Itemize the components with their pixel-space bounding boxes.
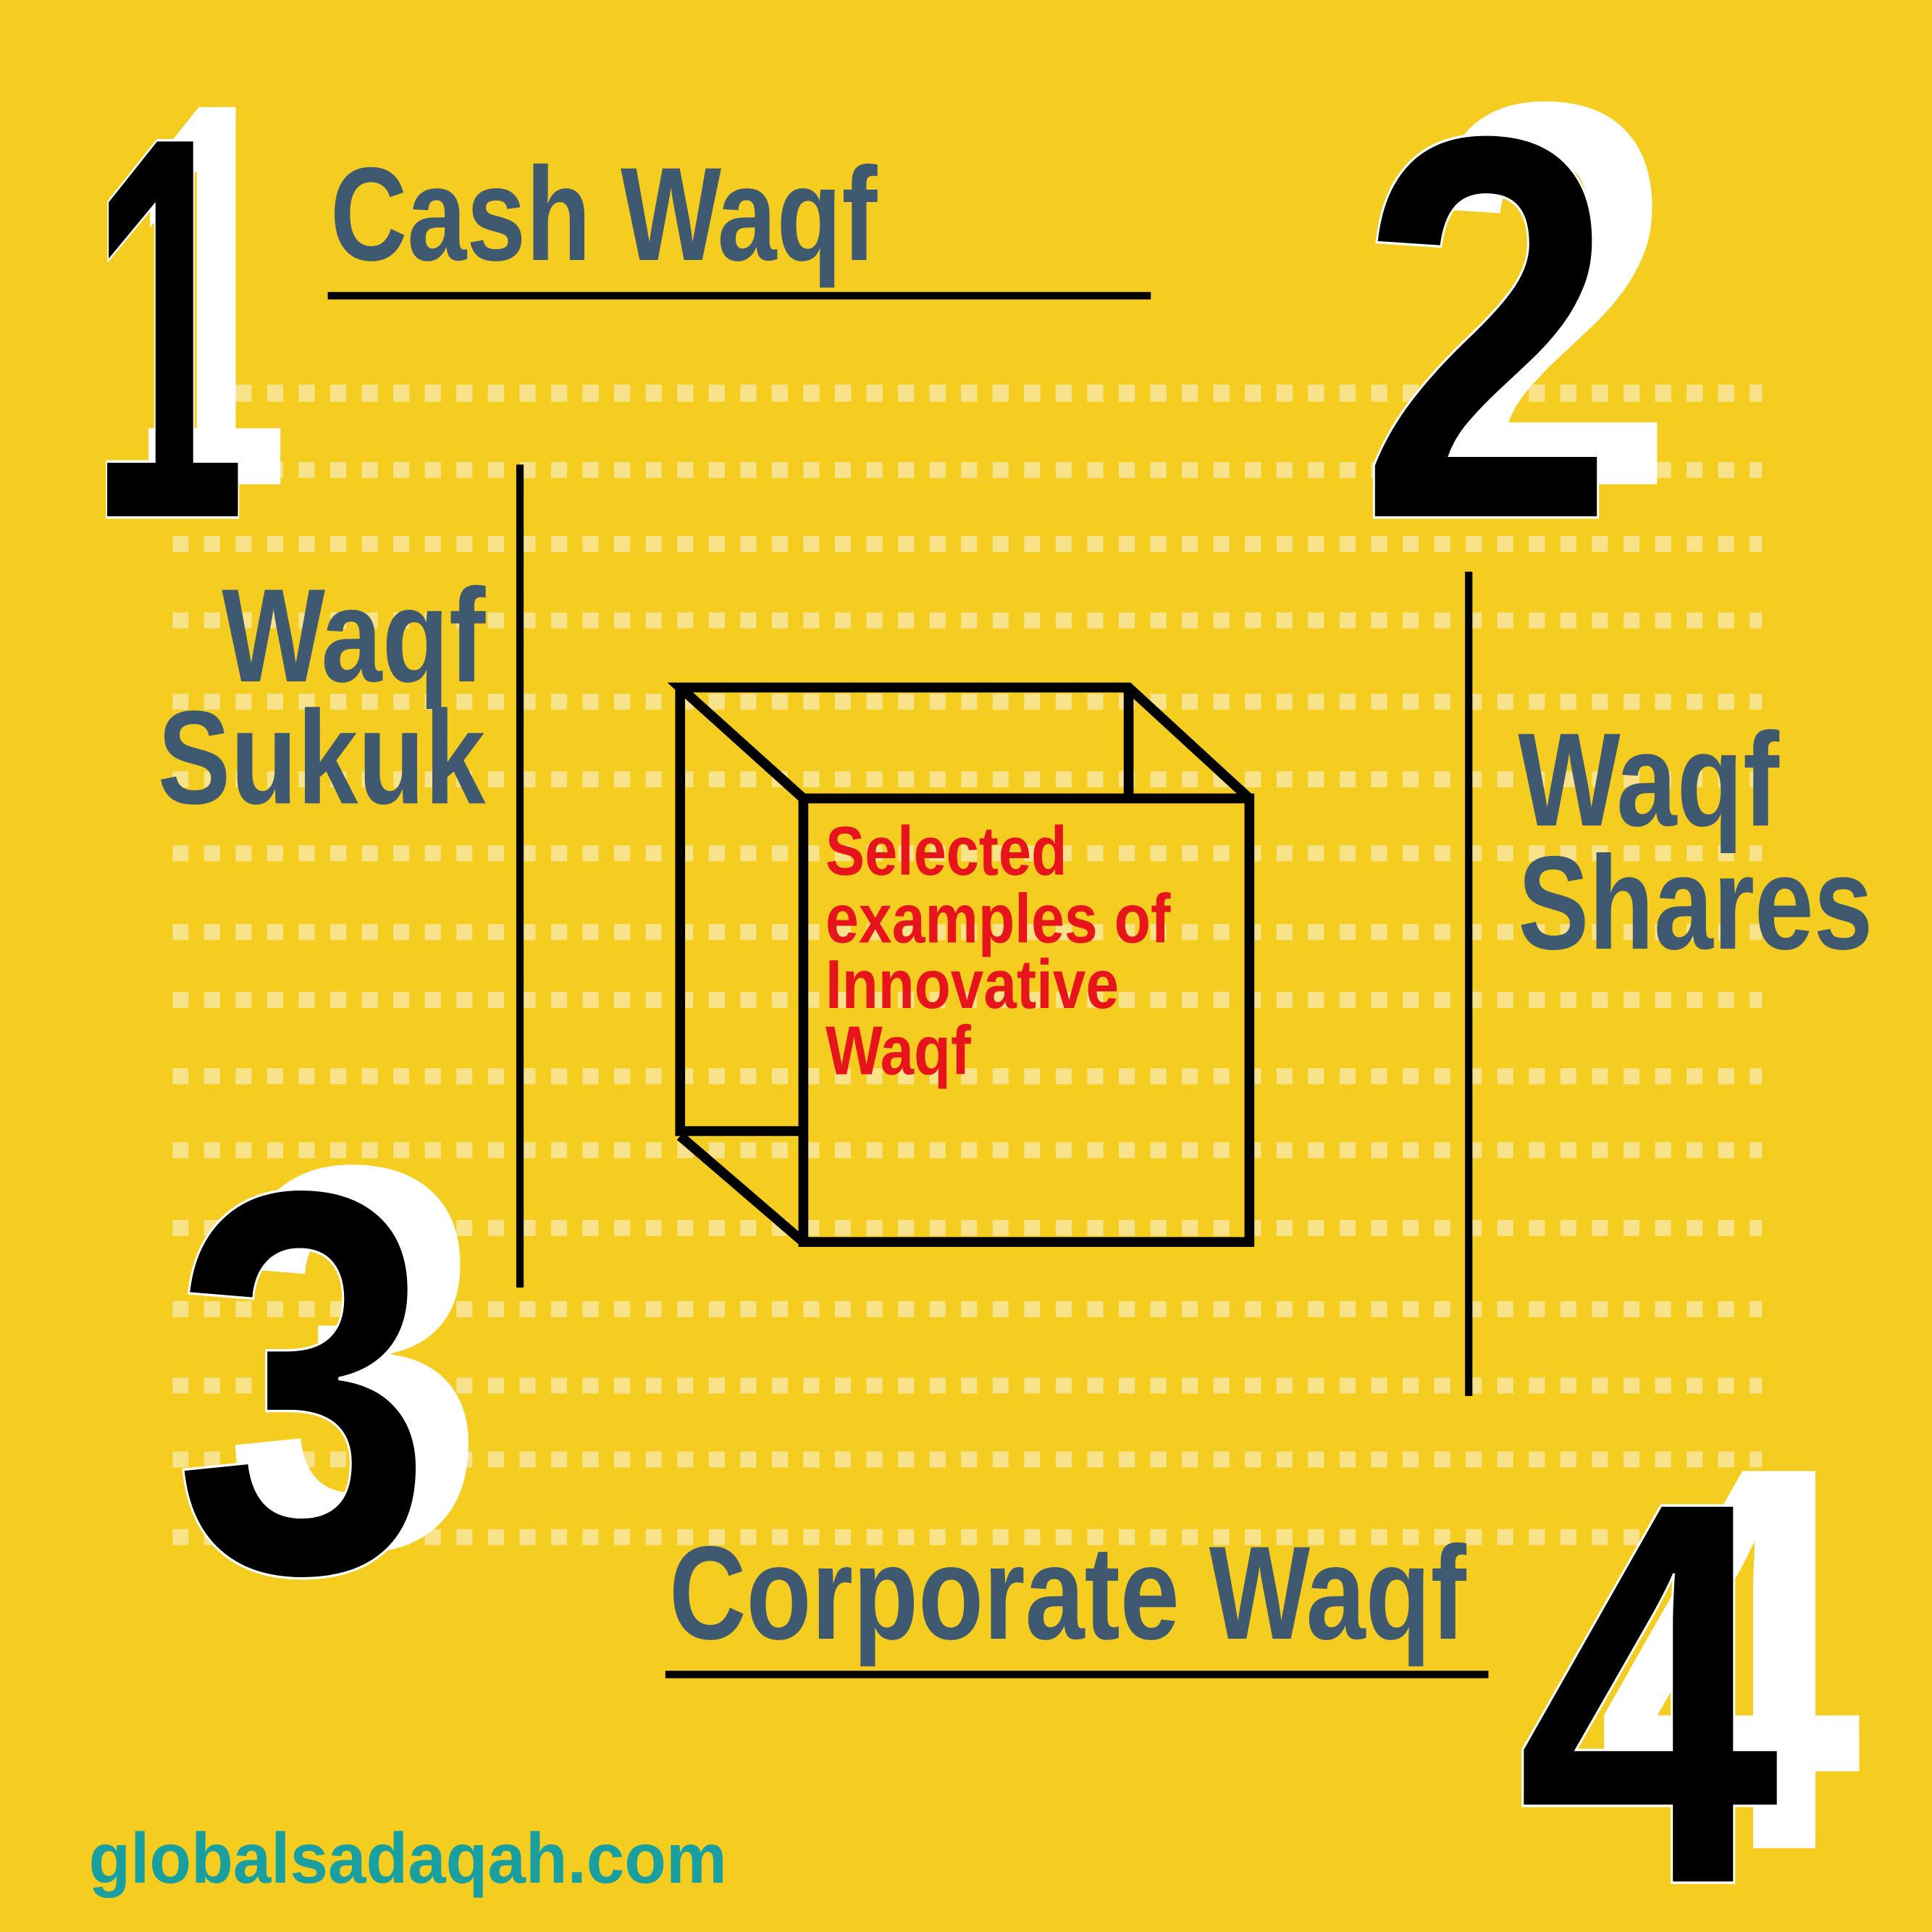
divider line left xyxy=(516,464,524,1288)
center title: examples of xyxy=(826,881,1171,958)
number 2: 2 xyxy=(1358,22,1616,634)
center title: Innovative xyxy=(826,946,1119,1023)
center title: Waqf xyxy=(826,1013,971,1090)
dotted background xyxy=(172,386,1762,1547)
number 1 xyxy=(89,0,288,634)
heading: Waqf Shares: Waqf xyxy=(1518,705,1780,854)
heading: Waqf Sukuk: Waqf xyxy=(222,561,486,710)
divider line right xyxy=(1465,572,1472,1396)
heading: Corporate Waqf: Corporate Waqf xyxy=(669,1519,1466,1667)
number 1: 1 xyxy=(130,0,288,601)
number 1: 1 xyxy=(89,22,246,634)
heading: Waqf Shares xyxy=(1518,705,1873,977)
center title xyxy=(826,813,1171,1090)
number 3: 3 xyxy=(172,1077,434,1689)
heading: Waqf Sukuk xyxy=(158,561,486,831)
heading: Waqf Sukuk: Sukuk xyxy=(158,683,486,831)
box icon with center title xyxy=(680,687,1249,1242)
footer url: globalsadaqah.com xyxy=(89,1818,727,1898)
center title: Selected xyxy=(826,813,1067,890)
number 3: 3 xyxy=(224,1052,485,1664)
heading: Cash Waqf: Cash Waqf xyxy=(330,140,878,288)
number 2: 2 xyxy=(1417,0,1676,601)
